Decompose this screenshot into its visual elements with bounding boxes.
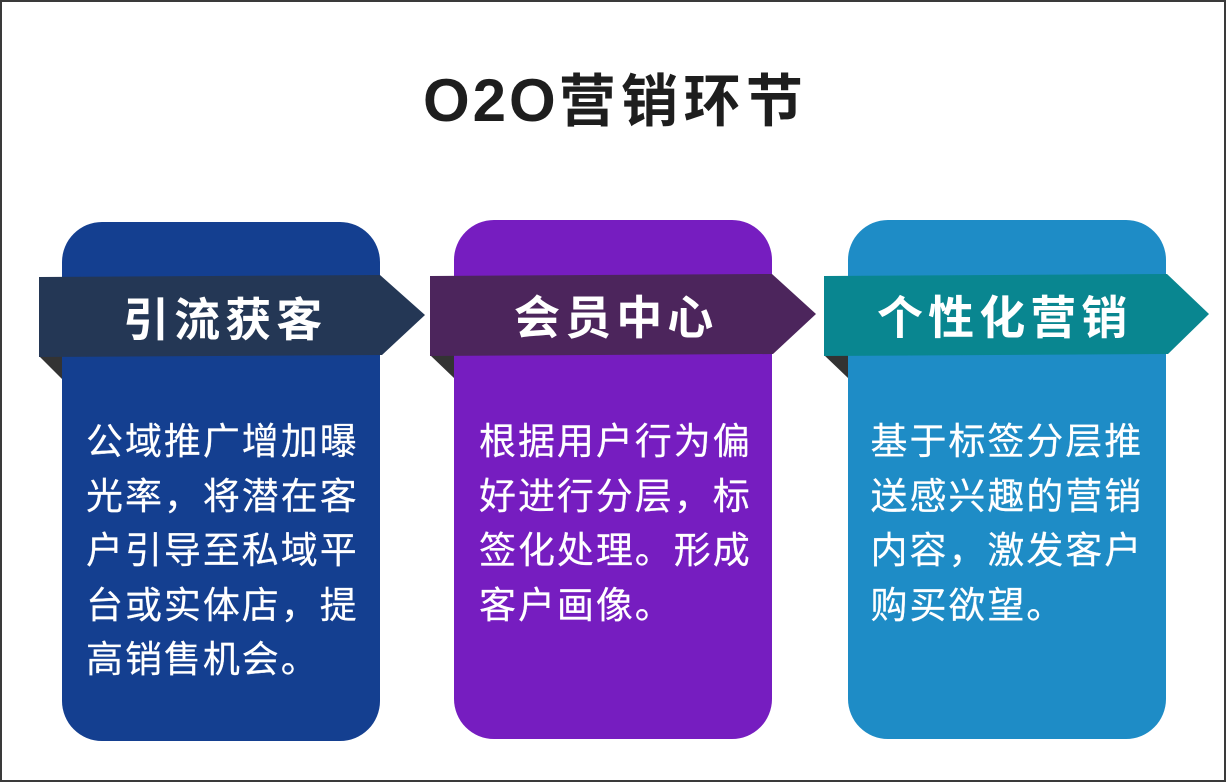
text: 个性化营销 body: 购买欲望。 <box>870 584 1065 626</box>
text: 个性化营销 body: 基于标签分层推 <box>870 421 1143 462</box>
text: 会员中心 body: 根据用户行为偏 <box>479 421 752 462</box>
text: 个性化营销 body: 内容，激发客户 <box>870 530 1143 571</box>
text: 会员中心 body: 好进行分层，标 <box>479 476 752 516</box>
panel: 个性化营销 <box>848 220 1166 739</box>
text: 会员中心 body: 签化处理。形成 <box>479 530 752 571</box>
text: 引流获客 body: 户引导至私域平 <box>86 530 359 571</box>
text: 引流获客 body: 光率，将潜在客 <box>86 476 359 516</box>
heading: 个性化营销: 个性化营销 <box>877 292 1132 344</box>
text: 引流获客 body <box>86 421 359 680</box>
text: 会员中心 body: 客户画像。 <box>479 584 674 626</box>
text: 引流获客 body: 台或实体店，提 <box>86 584 359 626</box>
text: 引流获客 body: 高销售机会。 <box>86 639 320 680</box>
ribbon: 个性化营销 <box>824 274 1209 378</box>
text: 个性化营销 body: 送感兴趣的营销 <box>870 476 1143 516</box>
heading: 引流获客: 引流获客 <box>123 294 327 346</box>
title: O2O营销环节 <box>423 67 808 134</box>
text: 个性化营销 body <box>870 421 1143 626</box>
text: 引流获客 body: 公域推广增加曝 <box>86 421 359 462</box>
ribbon: 引流获客 <box>39 275 425 379</box>
panel: 引流获客 <box>62 222 380 741</box>
panel: 会员中心 <box>454 220 772 739</box>
text: 会员中心 body <box>479 421 752 626</box>
heading: 会员中心: 会员中心 <box>514 292 718 344</box>
ribbon: 会员中心 <box>430 274 816 378</box>
